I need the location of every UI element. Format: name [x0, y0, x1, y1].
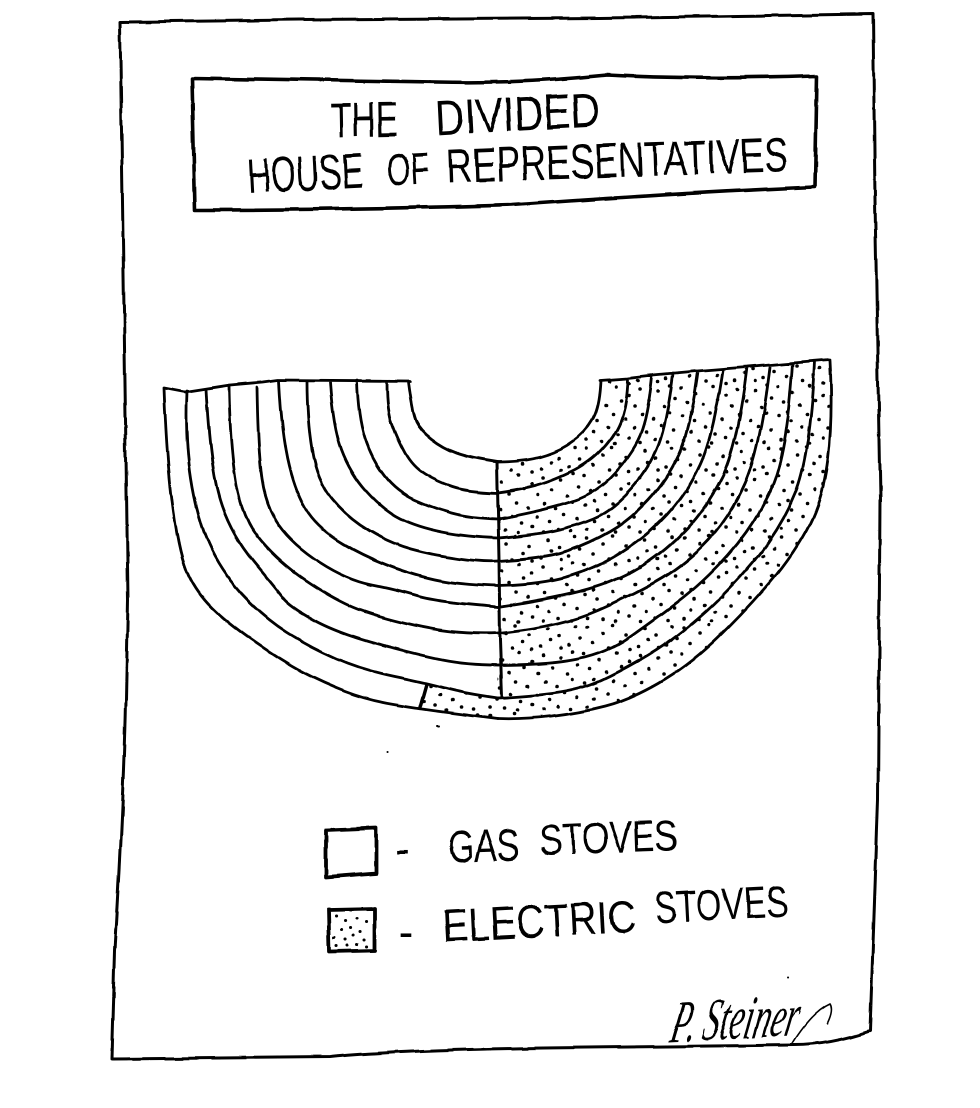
gas stoves label: STOVES: [539, 811, 678, 865]
gas stoves label: [396, 811, 678, 873]
electric stoves label: [399, 877, 789, 952]
hand-inked drawing: [112, 14, 880, 1059]
title text: THE: [330, 93, 398, 148]
gas stoves half: rows: [164, 380, 498, 719]
gas stoves swatch: [326, 828, 376, 877]
title block: [192, 75, 817, 210]
electric stoves half: rows: [498, 360, 831, 719]
electric stoves label: STOVES: [653, 877, 789, 933]
electric stoves stippled half: [420, 361, 831, 719]
title text: OF: [386, 142, 430, 196]
centre dividing aisle: [497, 462, 502, 697]
gas stoves label: -: [396, 834, 410, 867]
signature: P. Steiner: [665, 982, 806, 1056]
electric stoves label: -: [399, 917, 413, 950]
semicircle seating chart: [164, 360, 831, 719]
dividing mark on outer row: [420, 684, 427, 709]
title text: [246, 83, 789, 204]
signature: [665, 982, 831, 1056]
hand-drawn page frame: [112, 14, 880, 1059]
title text: DIVIDED: [434, 83, 601, 146]
title text: HOUSE: [246, 144, 364, 204]
gas stoves label: GAS: [448, 819, 520, 873]
title box: [192, 75, 817, 210]
stray ink specks: [387, 726, 788, 977]
electric stoves label: ELECTRIC: [441, 890, 637, 952]
legend: [326, 811, 789, 952]
electric stoves swatch: [328, 909, 375, 952]
title text: REPRESENTATIVES: [445, 128, 789, 194]
